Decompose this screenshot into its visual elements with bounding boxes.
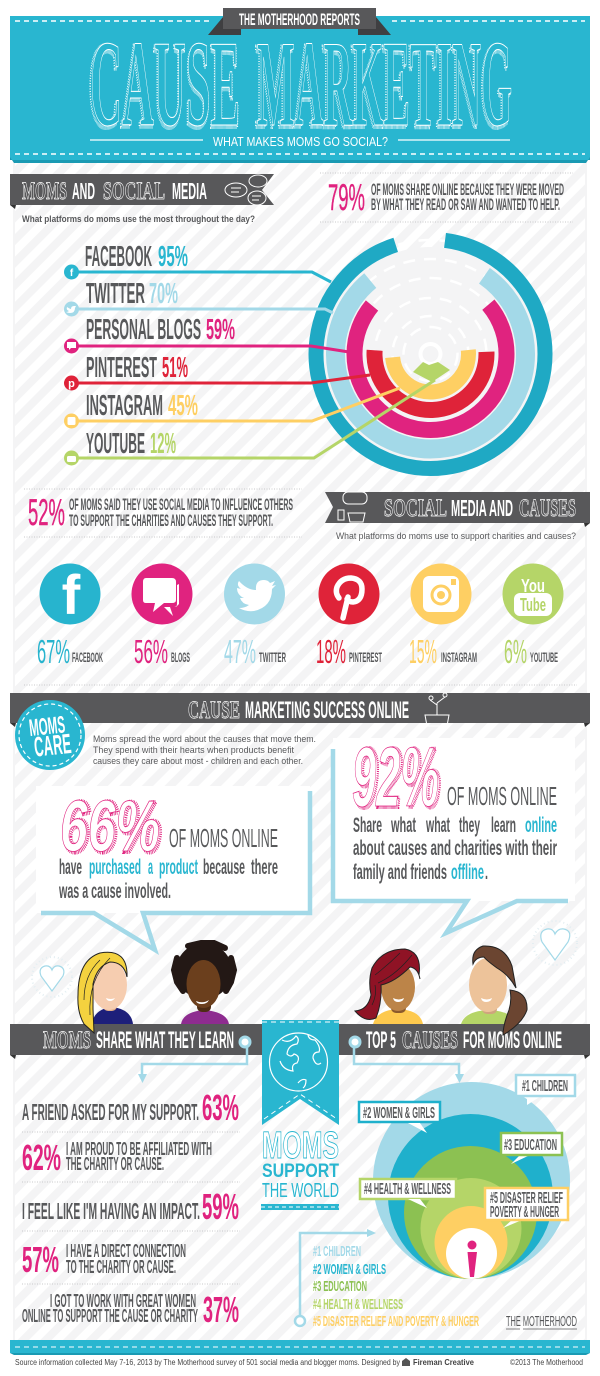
intro text: moms spread the word xyxy=(93,734,316,767)
platform row: instagram 45%: INSTAGRAM xyxy=(86,390,163,422)
legend: top 5 causes: #1 CHILDREN xyxy=(313,1243,361,1260)
question: platforms for charities: What platforms do moms use to support charities and causes? xyxy=(336,531,576,542)
footer: source: Source information collected May 7-16, 2013 by The Motherhood survey of 501 social media and blogger moms. Designed by xyxy=(15,1358,400,1367)
text: #4 HEALTH & WELLNESS xyxy=(364,1181,451,1198)
text: FACEBOOK xyxy=(72,649,103,665)
text: #2 WOMEN & GIRLS xyxy=(363,1105,435,1122)
social stat: pinterest 18% xyxy=(316,564,382,670)
list item: direct connection 57% xyxy=(22,1239,186,1280)
section banner: moms and social media: AND xyxy=(72,178,95,204)
platform row: pinterest 51%: PINTEREST xyxy=(86,352,157,384)
section banner: moms and social media: SOCIAL xyxy=(103,178,165,205)
platform row: instagram 45%: 45% xyxy=(168,390,198,422)
legend: top 5 causes: #4 HEALTH & WELLNESS xyxy=(313,1296,403,1313)
callout: 92% share xyxy=(333,730,575,933)
social stat: facebook 67% xyxy=(37,563,103,670)
bottom band xyxy=(10,1340,590,1355)
list item: direct connection 57%: 57% xyxy=(22,1239,59,1280)
icon: plant xyxy=(425,693,449,726)
title: cause marketing: CAUSE xyxy=(88,17,240,154)
title: cause marketing: CAUSE xyxy=(90,15,240,152)
woman: dark curly hair xyxy=(174,943,234,1024)
footer: source: ©2013 The Motherhood xyxy=(510,1358,583,1367)
callout: 92% share: what xyxy=(425,814,450,837)
section banner: top 5 causes: TOP 5 xyxy=(366,1027,396,1054)
woman: red hair xyxy=(355,949,423,1024)
platform row: personal blogs 59%: PERSONAL BLOGS xyxy=(86,314,201,346)
stat: 52% influence others xyxy=(24,489,302,537)
list item: impact 59% xyxy=(22,1186,239,1227)
section banner: social media and causes: SOCIAL xyxy=(384,495,447,522)
section banner: cause marketing success online: CAUSE xyxy=(188,697,240,724)
callout: 92% share: learn xyxy=(491,814,516,837)
section banner: top 5 causes xyxy=(339,1024,590,1083)
ribbon text: moms support the world xyxy=(261,1125,339,1210)
platform row: youtube 12%: YOUTUBE xyxy=(86,428,145,460)
subtitle: WHAT MAKES MOMS GO SOCIAL? xyxy=(213,134,388,149)
platform row: pinterest 51%: 51% xyxy=(162,352,188,384)
woman: blonde xyxy=(78,952,133,1033)
callout: 92% share: family and friends xyxy=(353,861,447,884)
list item: great women 37% xyxy=(22,1289,239,1330)
platform row: pinterest 51% xyxy=(64,352,370,390)
icon: right heart xyxy=(533,921,577,965)
callout: 66% purchased xyxy=(36,786,310,950)
platform row: instagram 45% xyxy=(64,388,400,428)
intro text: moms spread the word: They spend with their hearts when products benefit xyxy=(93,745,294,756)
platform row: twitter 70%: TWITTER xyxy=(86,278,145,310)
icon: chat and mug xyxy=(338,492,367,522)
icon: info i xyxy=(468,1240,477,1277)
text: INSTAGRAM xyxy=(441,649,477,665)
social stat: youtube 6%: You xyxy=(521,576,545,596)
section banner: moms share what they learn xyxy=(10,1024,262,1083)
list item: a friend asked 63%: 63% xyxy=(202,1087,239,1128)
connector arrow: left xyxy=(138,1037,250,1083)
label: #5 disaster relief xyxy=(485,1188,568,1228)
section banner: moms and social media: MOMS xyxy=(22,178,67,205)
label: #1 children xyxy=(516,1075,575,1105)
list item: proud 62%: 62% xyxy=(22,1137,61,1178)
list item: great women 37%: I GOT TO WORK WITH GREAT WOMEN xyxy=(50,1291,196,1311)
list item: proud 62%: THE CHARITY OR CAUSE. xyxy=(66,1154,164,1174)
center ribbon with globe xyxy=(262,1020,339,1125)
ribbon: the motherhood reports: THE MOTHERHOOD REPORTS xyxy=(239,10,360,29)
platform row: personal blogs 59%: 59% xyxy=(206,314,235,346)
icon: left heart xyxy=(32,957,72,997)
ribbon text: moms support the world: THE WORLD xyxy=(262,1180,339,1202)
social stat: twitter 47%: 47% xyxy=(224,633,256,670)
badge: moms care: CARE xyxy=(33,728,73,763)
platform row: twitter 70% xyxy=(64,278,333,316)
callout: 66% purchased: product xyxy=(159,856,198,879)
platform row: youtube 12%: 12% xyxy=(150,428,176,460)
list item: a friend asked 63%: A FRIEND ASKED FOR MY SUPPORT. xyxy=(22,1099,199,1125)
text: I HAVE A DIRECT CONNECTION xyxy=(66,1241,186,1261)
nested circles chart: top causes xyxy=(373,1082,570,1279)
callout: 66% purchased: 66% xyxy=(62,788,162,868)
callout: 92% share: they xyxy=(459,814,480,837)
section banner: moms and social media: MEDIA xyxy=(172,178,207,204)
social stat: facebook 67%: f xyxy=(62,563,81,626)
platform row: facebook 95%: 95% xyxy=(158,241,188,273)
section banner: moms share what they learn: MOMS xyxy=(43,1027,91,1054)
legend: top 5 causes: #2 WOMEN & GIRLS xyxy=(313,1261,386,1278)
callout: 66% purchased: 66% xyxy=(60,787,160,867)
stat: 79% moved to help xyxy=(320,173,573,222)
section banner: moms and social media xyxy=(10,174,274,209)
social stat: instagram 15% xyxy=(409,564,477,670)
list item: proud 62% xyxy=(22,1137,212,1178)
list item: great women 37%: ONLINE TO SUPPORT THE CAUSE OR CHARITY xyxy=(22,1306,198,1326)
social stat: twitter 47% xyxy=(224,564,286,670)
callout: 92% share: 92% xyxy=(354,731,441,825)
section banner: top 5 causes: CAUSES xyxy=(402,1027,458,1054)
label: #3 education xyxy=(501,1133,562,1164)
ribbon text: moms support the world: MOMS xyxy=(262,1125,339,1167)
text: YOUTUBE xyxy=(530,649,558,665)
social stat: blogs 56% xyxy=(132,564,192,670)
callout: 92% share: offline xyxy=(451,861,484,884)
woman: brown ponytail xyxy=(461,946,527,1035)
social stat: pinterest 18%: 18% xyxy=(316,633,346,670)
text: TO SUPPORT THE CHARITIES AND CAUSES THEY SUPPORT. xyxy=(69,511,273,530)
callout: 66% purchased: because xyxy=(203,856,245,879)
callout: 92% share: Share xyxy=(353,814,382,837)
label: #2 women and girls xyxy=(359,1102,440,1133)
badge: moms care xyxy=(15,700,85,770)
ribbon text: moms support the world: SUPPORT xyxy=(262,1161,339,1182)
callout: 66% purchased: OF MOMS ONLINE xyxy=(169,823,278,853)
section banner: social media and causes: MEDIA AND xyxy=(451,495,513,521)
social stat: youtube 6%: Tube xyxy=(520,595,546,615)
text: TO THE CHARITY OR CAUSE. xyxy=(66,1257,176,1277)
connector arrow: right xyxy=(350,1037,464,1083)
icon: chat bubbles xyxy=(225,175,267,205)
platform row: pinterest 51%: p xyxy=(68,378,75,390)
badge: moms care: MOMS xyxy=(28,711,66,742)
callout: 92% share: . xyxy=(485,861,488,884)
stat: 79% moved to help: 79% xyxy=(328,177,365,218)
social stat: facebook 67%: 67% xyxy=(37,633,70,670)
platform row: youtube 12% xyxy=(64,380,435,466)
section banner: social media and causes xyxy=(325,492,590,527)
text: BLOGS xyxy=(171,649,190,665)
ribbon: the motherhood reports xyxy=(208,8,391,35)
callout: 92% share: 92% xyxy=(352,730,439,824)
callout: 92% share: what xyxy=(390,814,416,837)
label: #4 health and wellness xyxy=(360,1179,456,1208)
legend: top 5 causes: #3 EDUCATION xyxy=(313,1278,367,1295)
text: I AM PROUD TO BE AFFILIATED WITH xyxy=(66,1139,212,1159)
list item: impact 59%: I FEEL LIKE I'M HAVING AN IMPACT. xyxy=(22,1198,200,1224)
social stat: youtube 6% xyxy=(502,564,564,670)
platform row: facebook 95% xyxy=(64,241,331,282)
section banner: cause marketing success online: MARKETING SUCCESS ONLINE xyxy=(245,697,409,724)
social stat: instagram 15%: 15% xyxy=(409,633,437,670)
platform row: twitter 70%: 70% xyxy=(149,278,178,310)
text: 37% xyxy=(203,1289,239,1330)
ring chart xyxy=(298,222,563,486)
footer: source: Fireman Creative xyxy=(413,1357,474,1367)
platform row: facebook 95%: FACEBOOK xyxy=(85,241,152,273)
callout: 66% purchased: purchased xyxy=(89,856,141,879)
legend: top 5 causes xyxy=(295,1229,479,1330)
callout: 66% purchased: a xyxy=(148,856,153,879)
callout: 66% purchased: was a cause involved. xyxy=(58,880,171,903)
callout: 66% purchased: there xyxy=(251,856,278,879)
list item: impact 59%: 59% xyxy=(202,1186,239,1227)
intro text: moms spread the word: causes they care about most - children and each other. xyxy=(93,756,303,767)
question: platforms throughout the day: What platforms do moms use the most throughout the day? xyxy=(22,214,255,225)
callout: 66% purchased: have xyxy=(59,856,82,879)
platform row: facebook 95%: f xyxy=(70,268,74,279)
intro text: moms spread the word: Moms spread the word about the causes that move them. xyxy=(93,734,316,745)
social stat: blogs 56%: 56% xyxy=(134,633,168,670)
text: TWITTER xyxy=(259,649,286,665)
list item: a friend asked 63% xyxy=(22,1087,239,1128)
section banner: moms share what they learn: SHARE WHAT THEY LEARN xyxy=(96,1027,234,1054)
text: PINTEREST xyxy=(349,649,382,665)
social stat: youtube 6%: 6% xyxy=(504,633,527,670)
icon: globe xyxy=(270,1033,328,1091)
callout: 92% share: online xyxy=(525,814,557,837)
stat: 52% influence others: 52% xyxy=(28,492,65,533)
header banner xyxy=(10,8,590,163)
section banner: cause marketing success online xyxy=(10,693,590,727)
